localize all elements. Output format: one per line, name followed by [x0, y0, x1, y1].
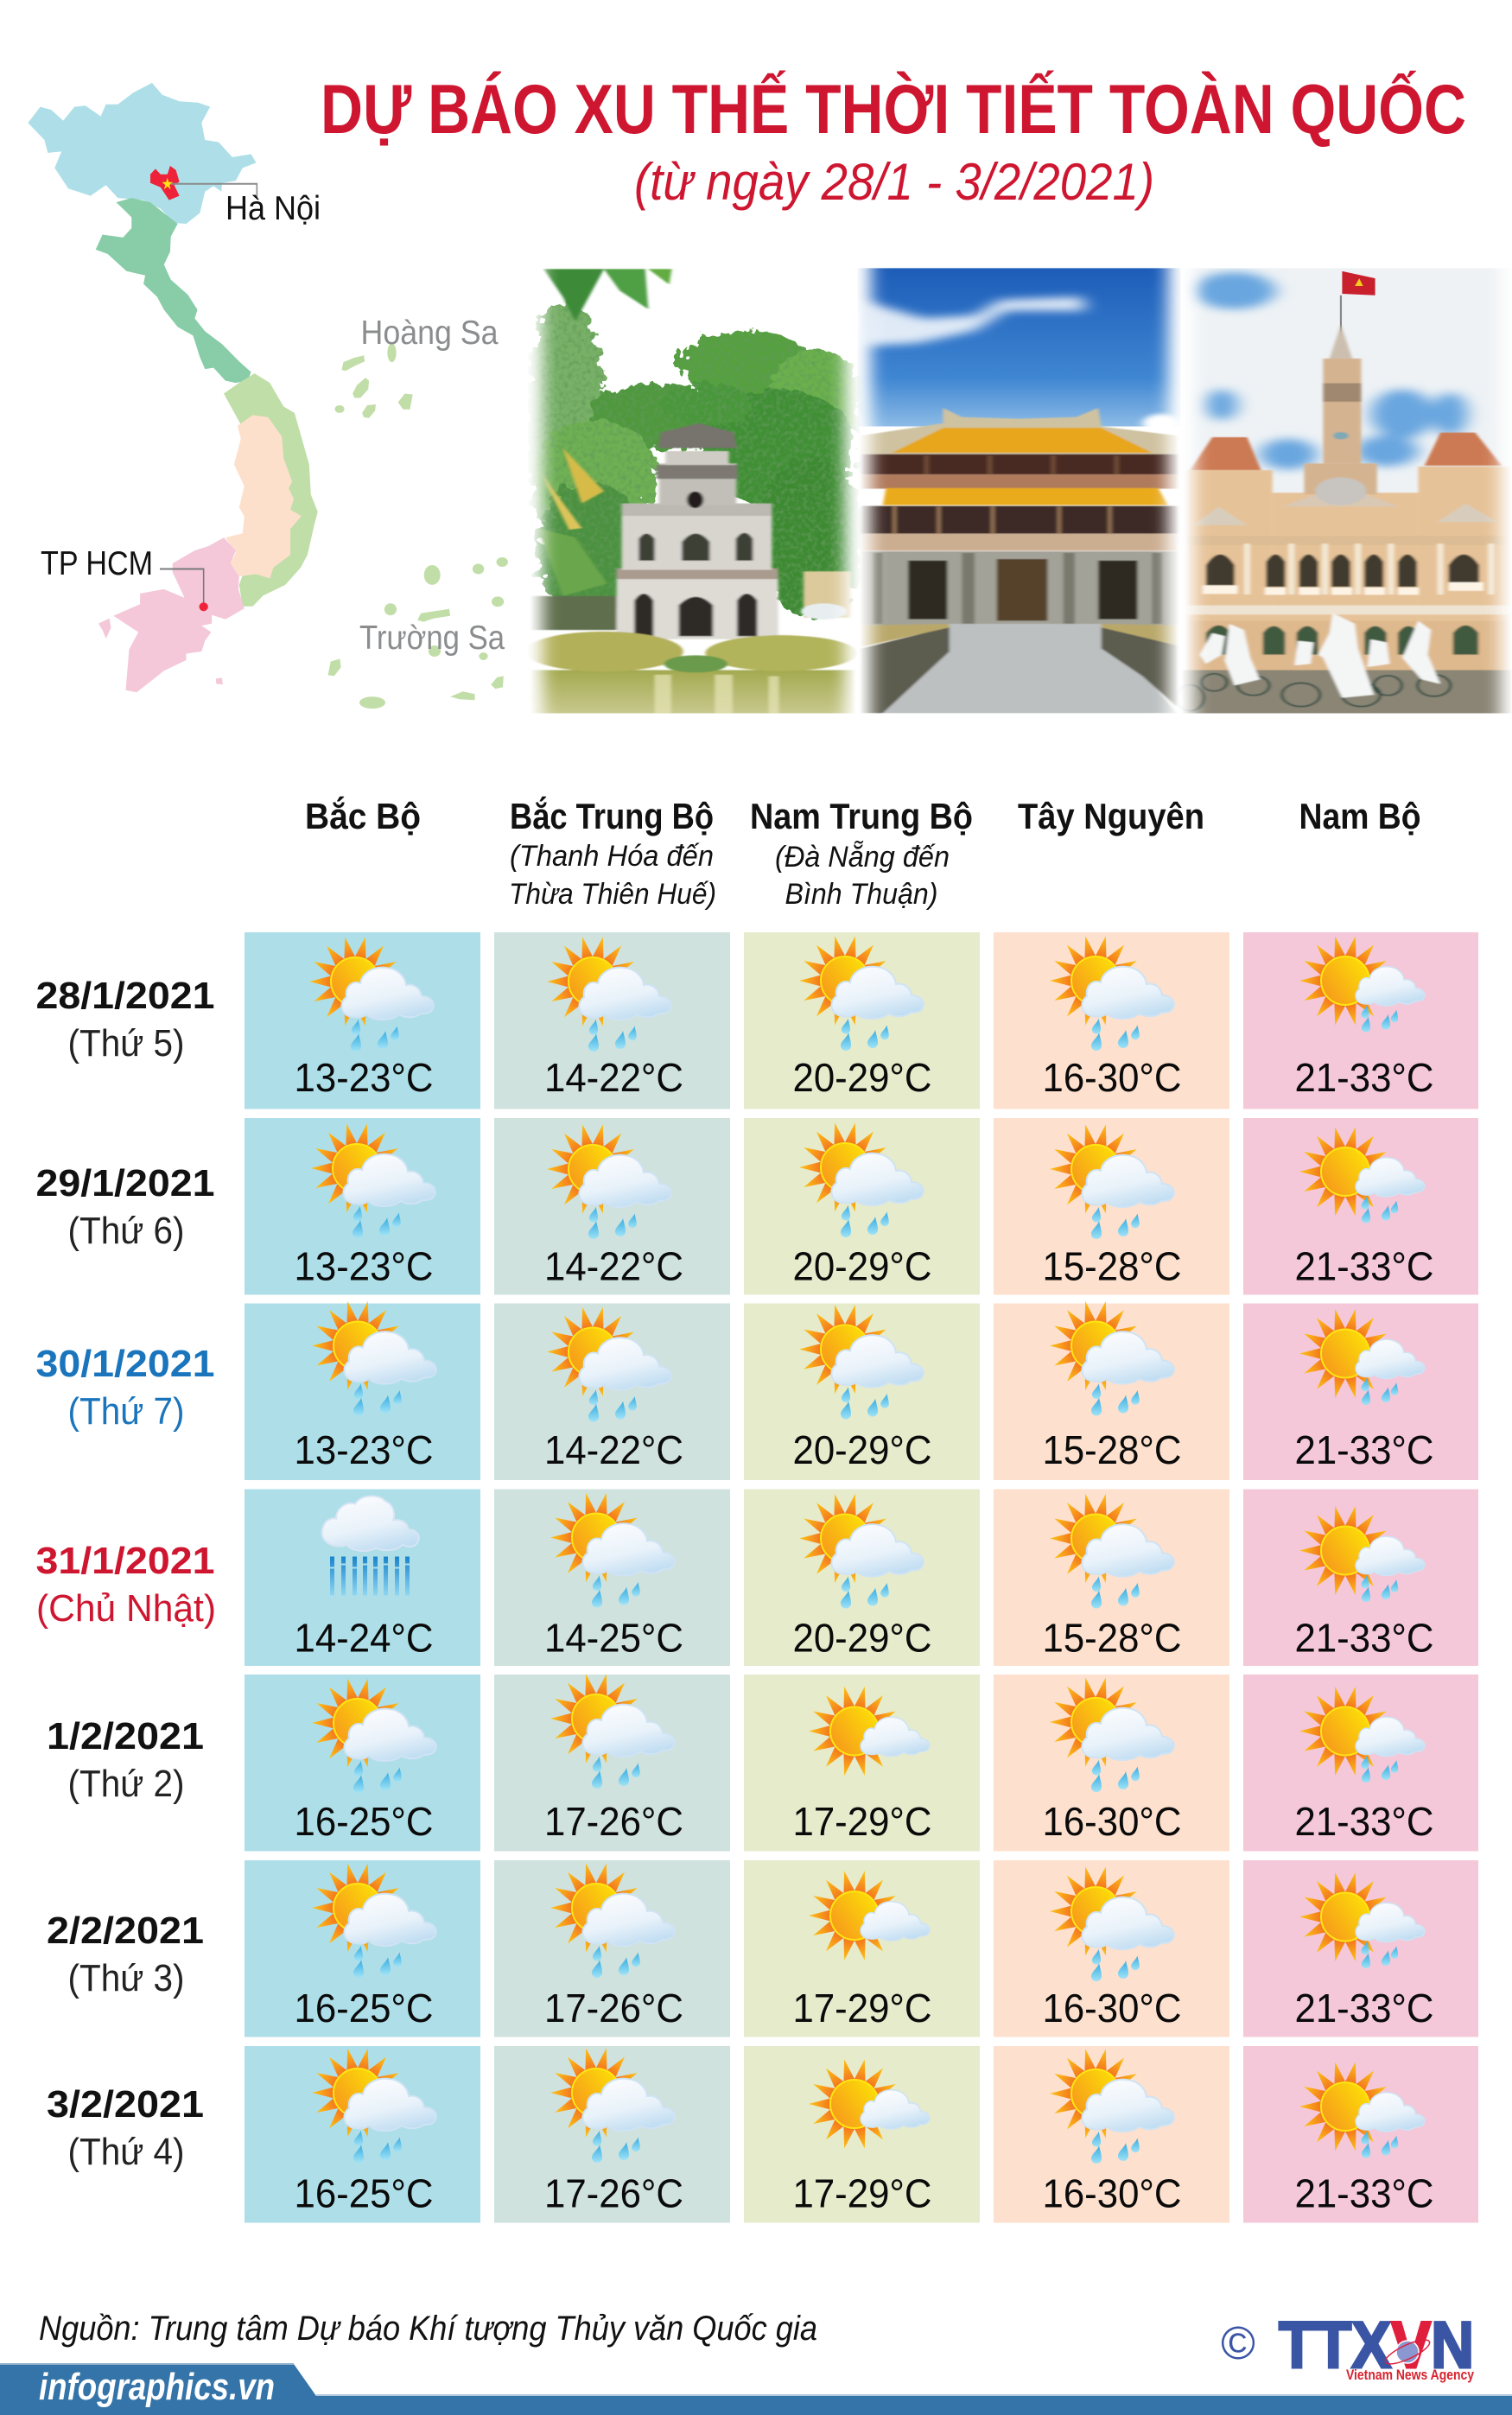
row 2/2: Bắc Trung Bộ [494, 1860, 730, 2037]
row 29/1: Tây Nguyên [994, 1118, 1229, 1294]
icon: sun cloud rain [550, 1491, 675, 1607]
icon: sun small cloud rain [1299, 1504, 1425, 1602]
temperature: 17-29°C [793, 2170, 931, 2215]
date: 2/2/2021 [47, 1910, 204, 1999]
row 31/1: Bắc Trung Bộ [494, 1490, 730, 1666]
temperature: 16-30°C [1042, 2170, 1182, 2215]
icon: sun cloud rain [799, 1303, 924, 1419]
row 28/1: Bắc Bộ [245, 932, 480, 1109]
logo wordmark: TTXVN [1279, 2309, 1474, 2382]
map: Hà Nội star [162, 178, 173, 189]
icon: sun cloud rain [312, 1677, 436, 1793]
temperature: 14-22°C [544, 1244, 683, 1289]
temperature: 21-33°C [1294, 1616, 1434, 1661]
column header: Nam Bộ: Nam Bộ [1299, 796, 1420, 836]
date: 30/1/2021: (Thứ 7) [67, 1390, 185, 1433]
date: 3/2/2021: (Thứ 4) [67, 2131, 185, 2173]
row 1/2: Bắc Bộ [245, 1675, 480, 1851]
icon: sun cloud rain [311, 1122, 435, 1238]
map of Vietnam [28, 83, 508, 709]
temperature: 16-25°C [294, 1986, 434, 2031]
icon: sun cloud rain [550, 1673, 675, 1789]
row 28/1: Bắc Trung Bộ [494, 932, 730, 1109]
temperature: 17-29°C [793, 1986, 931, 2031]
icon: sun cloud rain [1050, 1492, 1174, 1609]
icon: sun small cloud [809, 1685, 930, 1777]
sub-heading: Thanh Hóa đến Thừa Thiên Huế: Thừa Thiên Huế) [509, 878, 716, 911]
temperature: 17-26°C [544, 2170, 683, 2215]
temperature: 15-28°C [1042, 1616, 1182, 1661]
map: Hà Nội area [150, 166, 180, 200]
row 3/2: Bắc Bộ [245, 2046, 480, 2222]
row 30/1: Nam Bộ [1243, 1303, 1478, 1480]
date: 3/2/2021: 3/2/2021 [47, 2083, 204, 2126]
row 1/2: Tây Nguyên [994, 1675, 1229, 1851]
date: 1/2/2021: 1/2/2021 [47, 1715, 204, 1757]
temperature: 14-22°C [544, 1055, 683, 1100]
row 30/1: Bắc Trung Bộ [494, 1303, 730, 1480]
temperature: 13-23°C [294, 1427, 434, 1472]
date: 31/1/2021: (Chủ Nhật) [36, 1587, 216, 1630]
row 2/2: Tây Nguyên [994, 1860, 1229, 2037]
date: 2/2/2021: 2/2/2021 [47, 1910, 204, 1952]
icon: sun cloud rain [1050, 935, 1174, 1051]
column header: Nam Trung Bộ: Nam Trung Bộ [750, 796, 973, 836]
temperature: 21-33°C [1294, 2170, 1434, 2215]
temperature: 14-24°C [294, 1616, 434, 1661]
icon: sun small cloud rain [1299, 935, 1425, 1033]
icon: sun small cloud rain [1299, 1685, 1425, 1783]
source note: Nguồn: Trung tâm Dự báo Khí tượng Thủy văn Quốc gia [39, 2310, 817, 2348]
row 3/2: Nam Bộ [1243, 2046, 1478, 2222]
icon: sun cloud rain [547, 936, 671, 1052]
sub-heading: Đà Nẵng đến Bình Thuận: (Đà Nẵng đến [775, 841, 950, 874]
row 2/2: Nam Bộ [1243, 1860, 1478, 2037]
temperature: 16-25°C [294, 1799, 434, 1844]
icon: sun cloud rain [1050, 1865, 1174, 1981]
icon: sun cloud rain [1050, 1300, 1174, 1415]
row 1/2: Nam Trung Bộ [744, 1675, 980, 1851]
label: Hà Nội: Hà Nội [226, 190, 321, 227]
icon: sun small cloud [809, 1870, 930, 1961]
temperature: 13-23°C [294, 1055, 434, 1100]
icon: cloud with heavy rain [322, 1496, 419, 1595]
logo: TTXVN [1221, 2309, 1474, 2383]
date: 29/1/2021 [36, 1162, 214, 1252]
row 1/2: Nam Bộ [1243, 1675, 1478, 1851]
icon: sun cloud rain [550, 1862, 675, 1978]
islands: Hoàng Sa [334, 343, 413, 418]
row 3/2: Nam Trung Bộ [744, 2046, 980, 2222]
icon: sun cloud rain [1050, 2048, 1174, 2164]
temperature: 13-23°C [294, 1244, 434, 1289]
temperature: 14-22°C [544, 1427, 683, 1472]
map region: Bắc Bộ [28, 83, 257, 224]
icon: sun small cloud rain [1299, 1126, 1425, 1223]
islands: Trường Sa [328, 557, 508, 709]
logo globe and orbit [1382, 2336, 1433, 2368]
column header: Bắc Trung Bộ: Bắc Trung Bộ [510, 795, 714, 836]
label: Hoàng Sa: Hoàng Sa [361, 315, 499, 352]
date: 3/2/2021 [47, 2083, 204, 2173]
date: 30/1/2021 [36, 1343, 214, 1433]
icon: sun small cloud rain [1299, 1871, 1425, 1968]
row 30/1: Bắc Bộ [245, 1300, 480, 1480]
date: 28/1/2021: (Thứ 5) [67, 1022, 185, 1065]
temperature: 17-26°C [544, 1986, 683, 2031]
leader line: TP HCM [160, 569, 204, 604]
map region: Tây Nguyên [226, 415, 302, 578]
row 29/1: Bắc Bộ [245, 1118, 480, 1294]
icon: sun small cloud rain [1299, 2061, 1425, 2158]
date: 30/1/2021: 30/1/2021 [36, 1343, 214, 1385]
row 31/1: Bắc Bộ [245, 1490, 480, 1666]
photo strip [524, 266, 1512, 716]
icon: sun cloud rain [312, 1862, 436, 1978]
photo: Đại Nội Huế [857, 266, 1180, 714]
date: 1/2/2021 [47, 1715, 204, 1805]
temperature: 17-29°C [793, 1799, 931, 1844]
icon: sun cloud rain [312, 1300, 436, 1415]
temperature: 20-29°C [793, 1616, 931, 1661]
icon: sun cloud rain [799, 1122, 924, 1237]
footer bar [0, 2363, 1512, 2415]
date: 31/1/2021: 31/1/2021 [36, 1540, 214, 1582]
row 28/1: Nam Bộ [1243, 932, 1478, 1109]
map: TP HCM dot [200, 602, 208, 611]
temperature: 16-30°C [1042, 1799, 1182, 1844]
logo tagline: Vietnam News Agency [1346, 2367, 1474, 2383]
label: TP HCM: TP HCM [41, 545, 153, 582]
temperature: 16-30°C [1042, 1055, 1182, 1100]
column header: Nam Trung Bộ [750, 796, 973, 911]
date: 29/1/2021: 29/1/2021 [36, 1162, 214, 1204]
date: 28/1/2021 [36, 975, 214, 1065]
icon: sun cloud rain [547, 1123, 671, 1239]
row 29/1: Bắc Trung Bộ [494, 1118, 730, 1294]
temperature: 21-33°C [1294, 1427, 1434, 1472]
temperature: 20-29°C [793, 1055, 931, 1100]
row 31/1: Nam Trung Bộ [744, 1490, 980, 1666]
temperature: 16-30°C [1042, 1986, 1182, 2031]
row 1/2: Bắc Trung Bộ [494, 1673, 730, 1851]
row 30/1: Nam Trung Bộ [744, 1303, 980, 1480]
temperature: 21-33°C [1294, 1986, 1434, 2031]
icon: sun small cloud [809, 2058, 930, 2150]
sub-heading: Thanh Hóa đến Thừa Thiên Huế [509, 840, 716, 911]
temperature: 15-28°C [1042, 1427, 1182, 1472]
row 31/1: Tây Nguyên [994, 1490, 1229, 1666]
icon: sun cloud rain [547, 1306, 671, 1422]
date: 29/1/2021: (Thứ 6) [67, 1210, 185, 1252]
row 28/1: Nam Trung Bộ [744, 932, 980, 1109]
map region: Nam Bộ [98, 537, 245, 692]
sub-heading: Đà Nẵng đến Bình Thuận: Bình Thuận) [785, 878, 938, 911]
temperature: 20-29°C [793, 1244, 931, 1289]
temperature: 14-25°C [544, 1616, 683, 1661]
column header: Tây Nguyên: Tây Nguyên [1018, 796, 1204, 836]
column header: Bắc Bộ: Bắc Bộ [305, 795, 421, 836]
icon: sun cloud rain [1050, 1676, 1174, 1792]
row 29/1: Nam Trung Bộ [744, 1118, 980, 1294]
map region: Nam Trung Bộ [224, 373, 318, 607]
temperature: 16-25°C [294, 2170, 434, 2215]
temperature: 15-28°C [1042, 1244, 1182, 1289]
row 31/1: Nam Bộ [1243, 1490, 1478, 1666]
icon: sun cloud rain [799, 1492, 924, 1609]
date: 2/2/2021: (Thứ 3) [67, 1957, 185, 1999]
label: Trường Sa: Trường Sa [359, 620, 505, 657]
map region: Bắc Trung Bộ [96, 198, 251, 383]
column header: Bắc Trung Bộ [509, 795, 716, 911]
icon: sun cloud rain [799, 935, 924, 1051]
Tháp Rùa tower [617, 571, 778, 639]
row 29/1: Nam Bộ [1243, 1118, 1478, 1294]
footer site name: infographics.vn [39, 2366, 275, 2408]
temperature: 20-29°C [793, 1427, 931, 1472]
icon: sun cloud rain [312, 2047, 436, 2163]
row 30/1: Tây Nguyên [994, 1300, 1229, 1480]
sub-heading: Đà Nẵng đến Bình Thuận [775, 841, 950, 911]
icon: sun small cloud rain [1299, 1307, 1425, 1405]
row 2/2: Nam Trung Bộ [744, 1860, 980, 2037]
icon: sun cloud rain [1050, 1123, 1174, 1239]
row 3/2: Bắc Trung Bộ [494, 2046, 730, 2222]
row 3/2: Tây Nguyên [994, 2046, 1229, 2222]
date: 31/1/2021 [36, 1540, 216, 1630]
sub-heading: Thanh Hóa đến Thừa Thiên Huế: (Thanh Hóa đến [510, 840, 714, 873]
copyright mark: © [1221, 2317, 1255, 2369]
photo: UBND TP.HCM [1176, 266, 1512, 716]
row 28/1: Tây Nguyên [994, 932, 1229, 1109]
row 2/2: Bắc Bộ [245, 1860, 480, 2037]
date: 1/2/2021: (Thứ 2) [67, 1763, 185, 1805]
leader line: Hà Nội [171, 184, 257, 198]
temperature: 17-26°C [544, 1799, 683, 1844]
photo: Tháp Rùa, Hồ Gươm [524, 266, 864, 716]
icon: sun cloud rain [550, 2047, 675, 2163]
temperature: 21-33°C [1294, 1799, 1434, 1844]
subtitle: date range: (từ ngày 28/1 - 3/2/2021) [634, 153, 1154, 211]
temperature: 21-33°C [1294, 1055, 1434, 1100]
temperature: 21-33°C [1294, 1244, 1434, 1289]
date: 28/1/2021: 28/1/2021 [36, 975, 214, 1017]
icon: sun cloud rain [309, 936, 434, 1052]
Vietnamese flag [1339, 271, 1375, 334]
